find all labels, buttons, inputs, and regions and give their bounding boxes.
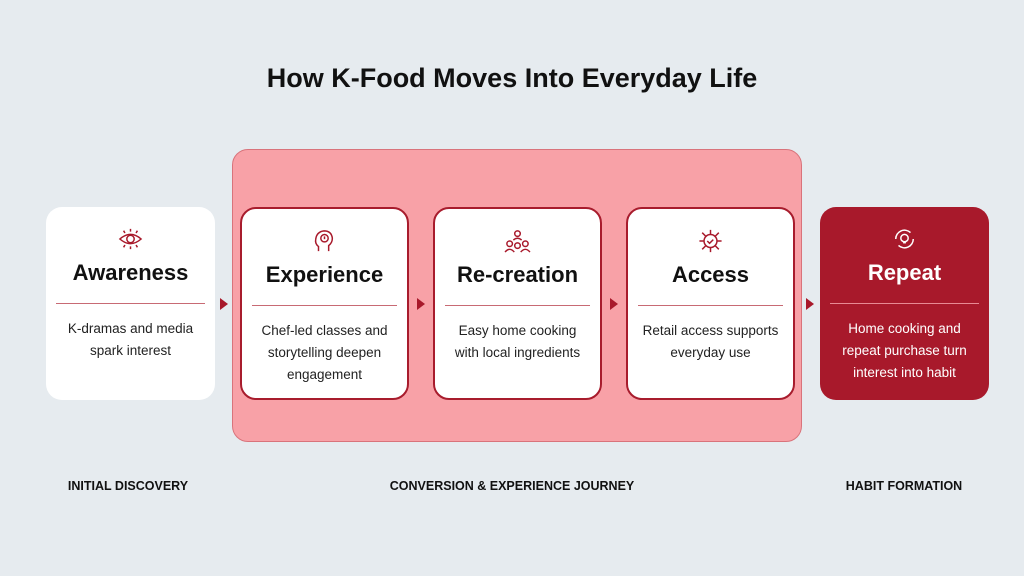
card: re-creation — [433, 207, 602, 400]
card: re-creation: Easy home cooking — [459, 323, 576, 338]
label: habit formation: HABIT FORMATION — [846, 479, 962, 493]
card: experience: Chef-led classes and — [261, 323, 388, 338]
card: repeat — [820, 207, 989, 400]
panel: conversion journey background — [232, 149, 802, 442]
card: repeat: Repeat — [868, 260, 941, 285]
icon: network — [699, 230, 722, 252]
icon: cycle bulb — [895, 229, 914, 249]
card: access: Retail access supports — [643, 323, 778, 338]
card: awareness: Awareness — [73, 260, 188, 285]
icon: eye — [118, 228, 142, 250]
card: experience: Experience — [266, 262, 383, 287]
arrow 1 — [220, 298, 228, 310]
card: awareness — [46, 207, 215, 400]
label: initial discovery: INITIAL DISCOVERY — [68, 479, 188, 493]
card: experience: storytelling deepen — [268, 345, 381, 360]
icon: head — [314, 230, 334, 252]
card: experience: engagement — [287, 367, 362, 382]
card: experience — [240, 207, 409, 400]
icon: people — [504, 230, 530, 252]
title: How K-Food Moves Into Everyday Life — [267, 63, 757, 93]
card: re-creation: with local ingredients — [455, 345, 580, 360]
arrow 2 — [417, 298, 425, 310]
arrow 3 — [610, 298, 618, 310]
card: repeat: interest into habit — [853, 365, 956, 380]
label: conversion journey: CONVERSION & EXPERIENCE JOURNEY — [390, 479, 634, 493]
card: awareness: spark interest — [90, 343, 171, 358]
card: repeat: Home cooking and — [848, 321, 961, 336]
card: access: Access — [672, 262, 749, 287]
card: awareness: K-dramas and media — [68, 321, 193, 336]
card: access: everyday use — [670, 345, 751, 360]
card: repeat: repeat purchase turn — [842, 343, 967, 358]
card: access — [626, 207, 795, 400]
arrow 4 — [806, 298, 814, 310]
card: re-creation: Re-creation — [457, 262, 578, 287]
